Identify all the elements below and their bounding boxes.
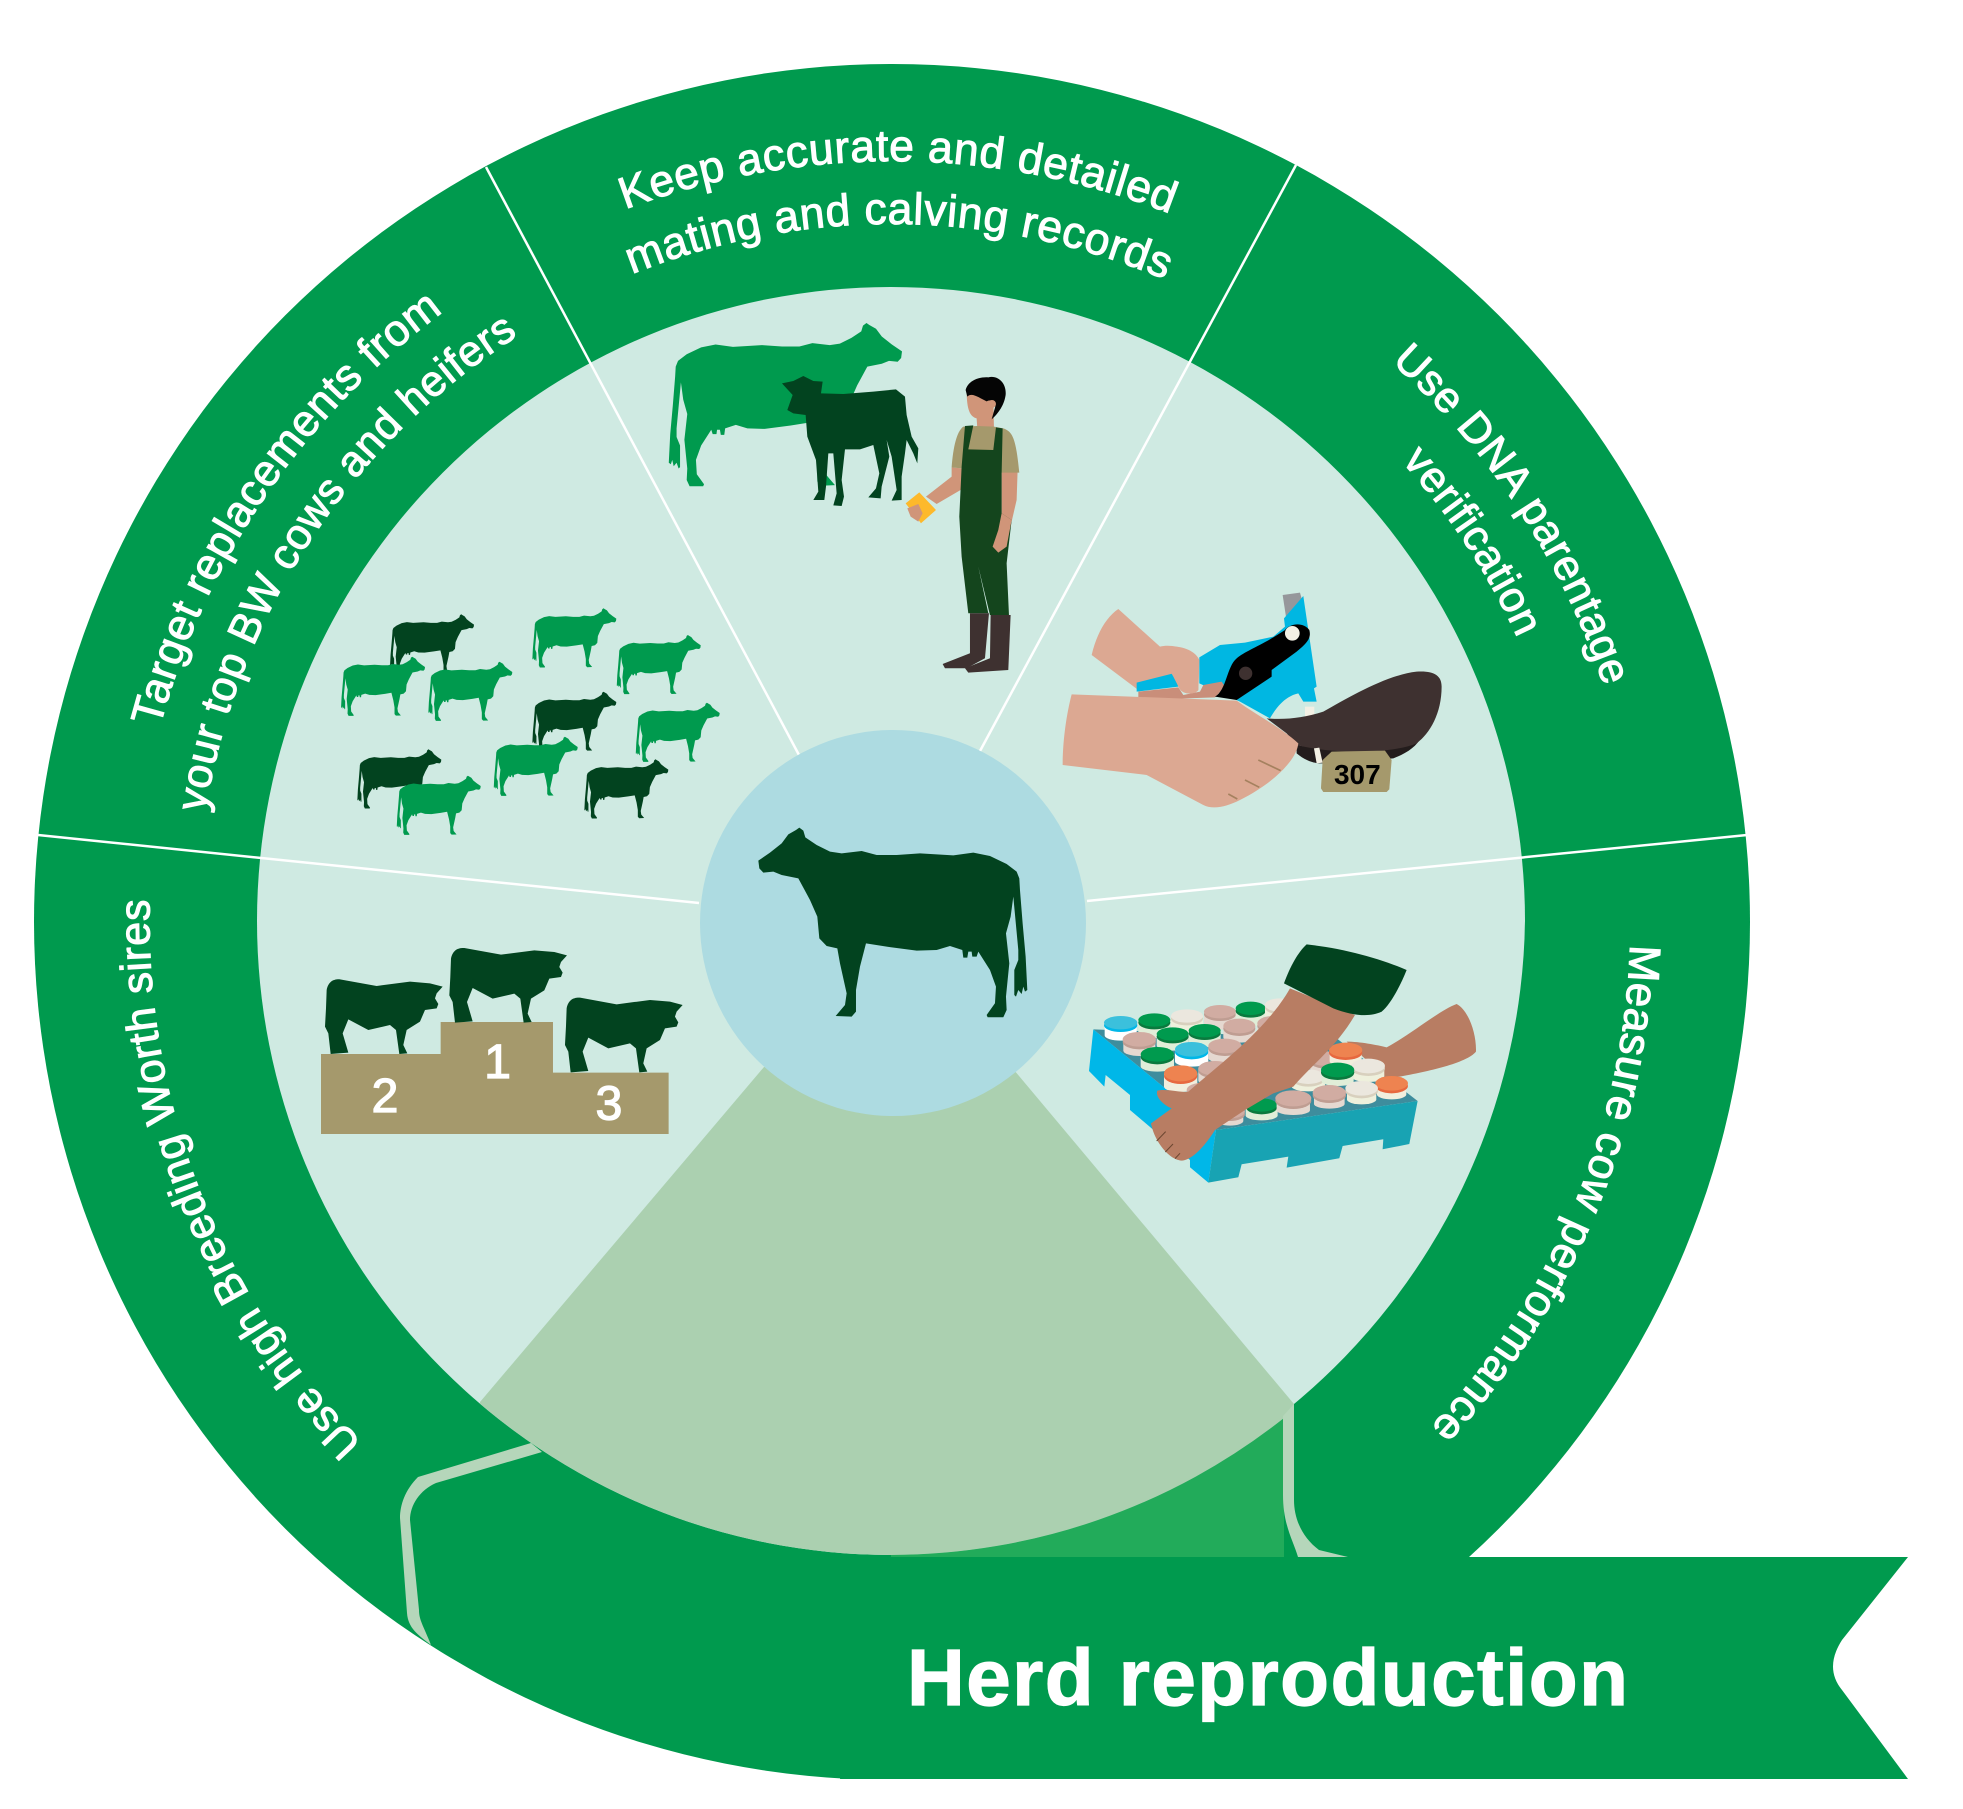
inner pale panel disc: [257, 287, 1525, 1555]
ear tag number: 307: [1334, 759, 1381, 790]
tray front side: [1208, 1101, 1418, 1183]
left fold strip: [400, 1443, 542, 1645]
upper hand: [1092, 609, 1199, 694]
podium number 3: 3: [596, 1077, 622, 1130]
panel: milk sample tray: [1089, 944, 1476, 1183]
bull third place: [565, 998, 683, 1072]
white mask below ribbon: [0, 1779, 1963, 1809]
ear tag: [1321, 751, 1392, 792]
ring text: keep accurate records: Keep accurate and detailed: [618, 132, 1180, 214]
panel: cow, calf and farmer: [669, 323, 1019, 673]
right fold strip: [1283, 1404, 1348, 1557]
ring text: target replacements: Target replacements from: [130, 296, 442, 720]
podium number 2: 2: [372, 1070, 398, 1123]
back sample vials: [1104, 998, 1337, 1126]
ring text: high breeding worth sires: Use high Breeding Worth sires: [119, 900, 357, 1462]
title ribbon: [840, 1557, 1908, 1779]
ring text: records second line: mating and calving records: [626, 192, 1171, 278]
far arm: [1347, 1004, 1476, 1077]
pliers eyelet: [1285, 626, 1300, 641]
blue tag applicator: [1137, 596, 1317, 718]
panel: sire podium: [321, 948, 683, 1134]
bull first place: [449, 948, 567, 1023]
black pliers: [1215, 624, 1310, 700]
lower hand: [1063, 694, 1298, 807]
applicator pin: [1305, 707, 1314, 717]
finger creases: [1228, 760, 1281, 799]
ring text: DNA parentage: Use DNA parentage: [1397, 342, 1624, 683]
icon: calf and farmer figure: [782, 376, 1019, 673]
radial divider lines: [38, 165, 1747, 903]
finger shadow: [1138, 682, 1225, 700]
ring text: measure cow performance: Measure cow performance: [1434, 948, 1661, 1439]
tray left side: [1089, 1029, 1216, 1183]
front sample vials: [1313, 1043, 1408, 1109]
bottom pale green wedge: [480, 1067, 1294, 1600]
lower right ring overlap: [1294, 921, 1700, 1557]
lower pin: [1314, 748, 1323, 763]
upper thumb: [1160, 647, 1199, 694]
near arm: [1151, 988, 1355, 1161]
mid green fold area: [891, 1418, 1284, 1557]
tray top: [1093, 1029, 1418, 1130]
podium number 1: 1: [484, 1036, 511, 1089]
panel: DNA ear tag sampling: [1063, 593, 1442, 807]
ring text: replacements second line: your top BW cows and heifers: [182, 320, 516, 813]
finger creases: [1157, 1132, 1180, 1159]
under ear dark: [1297, 737, 1422, 763]
icon: adult cow: [669, 323, 902, 486]
panel: herd of cows: [341, 608, 720, 835]
bull second place: [325, 979, 443, 1054]
cow ear: [1267, 672, 1442, 752]
title: Herd reproduction: [907, 1633, 1628, 1722]
centre blue circle: [700, 730, 1086, 1116]
ring text: verification: verification: [1406, 446, 1536, 636]
pliers pivot: [1239, 667, 1252, 680]
podium blocks: [321, 1022, 669, 1134]
applicator grey tip: [1283, 593, 1302, 617]
icon: centre cow: [758, 828, 1027, 1017]
dark sleeve: [1284, 944, 1407, 1015]
